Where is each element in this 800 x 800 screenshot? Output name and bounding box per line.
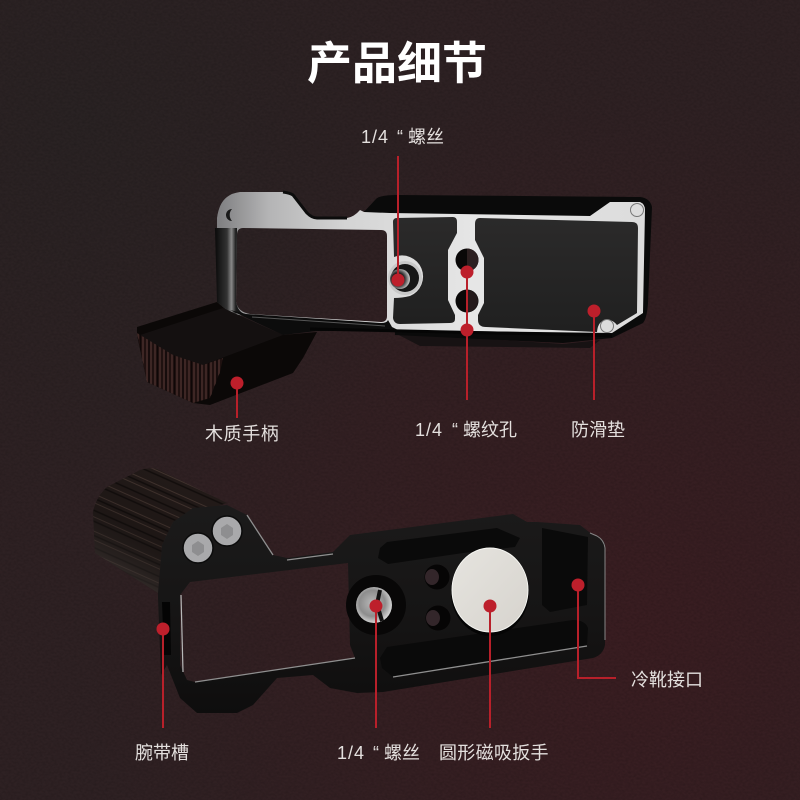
crescent mark — [226, 209, 232, 221]
threaded holes — [424, 564, 450, 590]
milled slots — [378, 528, 588, 677]
strap slot — [162, 602, 171, 655]
callout: anti-slip pad: 防滑垫 — [571, 420, 625, 440]
callout: strap slot — [135, 622, 189, 763]
wing screw — [356, 587, 392, 623]
edge highlights — [195, 515, 587, 682]
callout: 1/4 threaded hole — [415, 266, 517, 440]
callout: anti-slip pad — [571, 304, 625, 440]
screw — [388, 261, 422, 295]
title: 产品细节 — [307, 38, 487, 89]
callout: 1/4 screw top: 螺丝 — [408, 127, 444, 147]
round magnetic wrench — [451, 548, 529, 636]
callout: wooden grip: 木质手柄 — [205, 424, 279, 444]
callout: 1/4 threaded hole: 螺纹孔 — [463, 420, 517, 440]
silver plate face — [217, 192, 645, 333]
callout: 1/4 screw top — [361, 127, 444, 286]
hex screws — [183, 533, 213, 563]
silver highlight on lower band — [252, 317, 385, 326]
top bracket: front view with wooden grip — [137, 192, 652, 405]
callout: 1/4 screw bottom: 1/4 — [337, 743, 365, 763]
callout: wooden grip — [205, 376, 279, 444]
wood grip top face — [140, 308, 283, 365]
bottom bracket: rear view with wooden grip — [93, 468, 605, 713]
callout: round magnetic wrench: 圆形磁吸扳手 — [439, 743, 549, 763]
callout: cold shoe interface — [572, 578, 703, 690]
callout: 1/4 threaded hole: “ — [452, 420, 459, 440]
wood grip body — [137, 302, 317, 405]
black plate — [158, 505, 605, 713]
corner screws — [630, 204, 644, 216]
wood grip — [93, 468, 227, 593]
cold shoe recess — [542, 528, 588, 612]
black lower band — [230, 310, 400, 335]
callout: 1/4 threaded hole: 1/4 — [415, 420, 443, 440]
soft shadow — [395, 333, 600, 348]
callout: 1/4 screw top: “ — [397, 127, 404, 147]
dark rim on hump — [283, 192, 347, 218]
callout: cold shoe interface: 冷靴接口 — [631, 670, 703, 690]
callout: 1/4 screw bottom: “ — [373, 743, 380, 763]
callout: round magnetic wrench — [439, 600, 549, 763]
black mounting pad left — [393, 217, 457, 324]
threaded slots — [456, 248, 478, 272]
black left column — [215, 228, 245, 314]
wood grip end grain — [137, 333, 223, 403]
callout: strap slot: 腕带槽 — [135, 743, 189, 763]
black anti-slip pad right — [475, 218, 638, 332]
callout: 1/4 screw top: 1/4 — [361, 127, 389, 147]
callout: 1/4 screw bottom: 螺丝 — [384, 743, 420, 763]
callout: 1/4 screw bottom — [337, 600, 420, 763]
recess around screw — [346, 575, 406, 635]
dark back plate — [363, 195, 652, 343]
